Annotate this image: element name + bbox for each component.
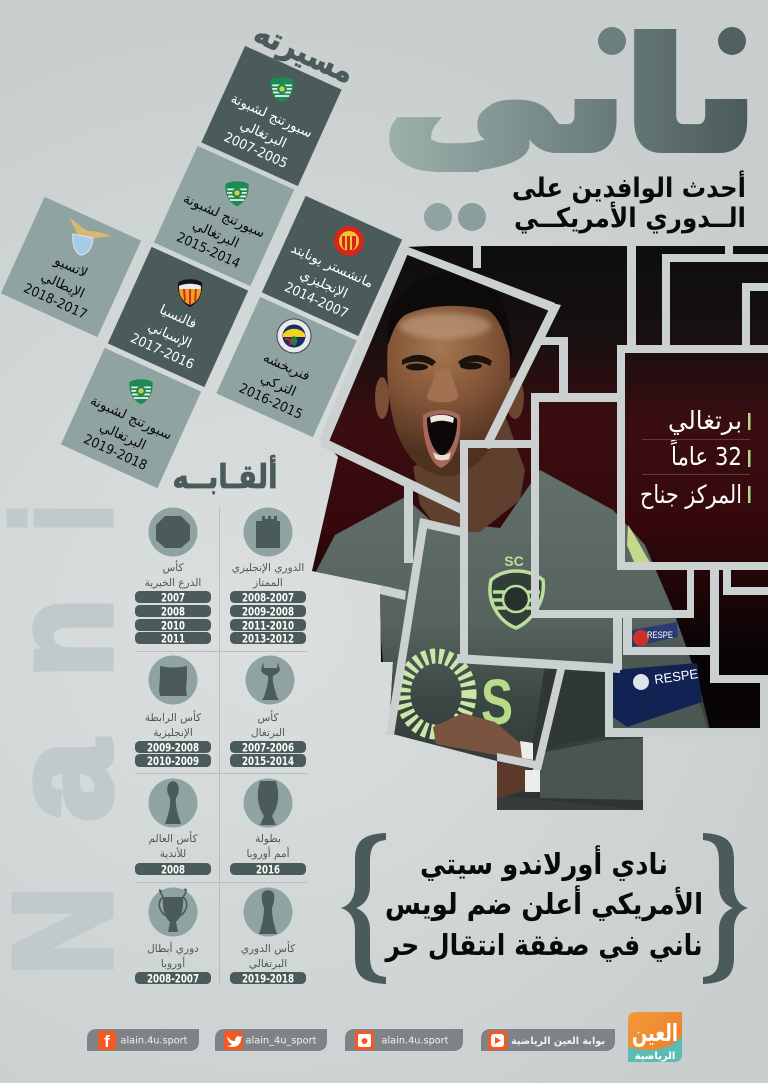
honour: Euro (230, 778, 306, 876)
panel: Manchester United: الإنجليزي (297, 267, 350, 302)
ears (375, 377, 389, 419)
honour: Premier League: 2011-2010 (242, 618, 294, 632)
shirt crest: Sporting (490, 553, 543, 628)
honour: Premier League (230, 508, 306, 646)
honour: Portuguese League: كأس الدوري (241, 941, 295, 955)
honour: Community Shield: 2008 (161, 604, 185, 618)
icon: Lazio eagle crest (69, 217, 111, 255)
panel: Sporting 2014-2015: البرتغالي (190, 217, 241, 252)
honour: Club World Cup: للأندية (160, 847, 186, 860)
social: instagram: alain.4u.sport (382, 1036, 449, 1046)
honour: Champions League: دوري أبطال (147, 941, 199, 955)
darker lower shirt (534, 668, 605, 738)
panel: Lazio: الإيطالي (39, 268, 87, 302)
title: Nani in Arabic (389, 27, 748, 231)
nose (427, 368, 458, 402)
icon: cup (261, 662, 280, 700)
honour: Community Shield: 2011 (161, 632, 185, 646)
social: youtube: بوابة العين الرياضية (511, 1036, 605, 1047)
hand (433, 713, 523, 760)
icon: league cup (159, 666, 187, 696)
social: instagram (345, 1029, 463, 1051)
photo collage: player (300, 240, 768, 820)
honour: Taca de Portugal (230, 656, 306, 768)
honour: League Cup: الإنجليزية (153, 727, 193, 739)
icon: league trophy (259, 890, 277, 934)
captain armband: RESPE (653, 666, 699, 687)
face (387, 292, 510, 476)
panel: Sporting 2005-2007: البرتغالي (238, 117, 289, 152)
panel: Sporting 2018-2019 (61, 348, 201, 488)
honour: Taca de Portugal: 2007-2006 (242, 740, 294, 754)
honour: Community Shield: الدرع الخيرية (145, 577, 201, 589)
panel: Lazio (1, 197, 141, 337)
title: Nani in Arabic: ناني (384, 10, 756, 184)
neck (413, 415, 525, 532)
fact: position: المركز جناح (640, 480, 742, 509)
honour: Portuguese League (230, 888, 306, 986)
honour: Community Shield (135, 508, 211, 646)
panel: Valencia (108, 247, 248, 387)
social: youtube (481, 1029, 615, 1051)
panel: Valencia: الإسباني (146, 318, 194, 352)
logo: Al Ain Sports: العين (632, 1019, 678, 1047)
heading: career: مسيرته (248, 15, 360, 91)
mouth (423, 410, 460, 468)
eyes (406, 364, 428, 370)
shirt sponsor letter: S (481, 666, 513, 738)
panel: Valencia: 2017-2016 (128, 330, 197, 373)
icon: Sporting crest (225, 181, 249, 206)
panel: Valencia: فالنسيا (157, 302, 199, 332)
social: twitter: alain_4u_sport (246, 1036, 317, 1046)
social: twitter (215, 1029, 327, 1051)
panel: Manchester United (262, 196, 402, 336)
honour: Premier League: الدوري الإنجليزي (232, 562, 304, 574)
honour: Champions League: أوروبا (161, 956, 185, 970)
head group (375, 306, 524, 476)
wrist (497, 762, 527, 798)
honour: Premier League: 2009-2008 (242, 604, 294, 618)
shoulder detail (627, 525, 650, 562)
panel: Fenerbahce: فنربخشه (261, 349, 312, 385)
honour: League Cup: 2010-2009 (147, 754, 199, 768)
social: facebook (87, 1029, 199, 1051)
quote: text (384, 845, 703, 962)
honour: Club World Cup (135, 778, 211, 876)
honour: Community Shield: 2007 (161, 590, 185, 604)
honour: Premier League: 2013-2012 (242, 632, 294, 646)
honour: Champions League (135, 888, 211, 986)
fact: age: 32 عاماً (670, 439, 742, 471)
subtitle: أحدث الوافدين على (512, 170, 746, 204)
panel: Sporting 2018-2019: 2019-2018 (81, 431, 150, 474)
panel: Sporting 2005-2007: 2007-2005 (222, 129, 290, 172)
panel: Manchester United: مانشستر يونايتد (288, 240, 376, 292)
social: facebook: alain.4u.sport (120, 1036, 188, 1046)
icon: Sporting crest (129, 379, 153, 404)
icon: Premier League trophy (256, 516, 280, 548)
icon: shield (156, 516, 190, 548)
quote: braces (341, 833, 748, 984)
panel: Manchester United: 2014-2007 (282, 279, 351, 322)
hair (388, 292, 512, 360)
honour: Euro: 2016 (256, 862, 280, 876)
honour: League Cup (135, 656, 211, 768)
subtitle: الــدوري الأمريكــي (514, 201, 746, 234)
panel: Lazio: لاتسيو (51, 252, 90, 281)
honours dividers (135, 507, 307, 985)
panel: Sporting 2018-2019: البرتغالي (97, 419, 148, 454)
honour: Club World Cup: كأس العالم (149, 831, 197, 845)
honour: Taca de Portugal: 2015-2014 (242, 754, 294, 768)
forearm sleeve (540, 738, 643, 800)
shirt crest: Sporting: SC (504, 553, 524, 569)
watermark: Nani vertical lettering (0, 504, 140, 975)
panel: Sporting 2014-2015: 2015-2014 (174, 229, 243, 272)
honour: Premier League: 2008-2007 (242, 590, 294, 604)
fact: nationality: برتغالي (668, 406, 742, 435)
panel: Fenerbahce: 2016-2015 (237, 380, 305, 423)
armband upper (632, 622, 678, 647)
honour: Euro: بطولة (255, 833, 281, 845)
icon: Euro trophy (258, 781, 278, 825)
photo frames: light strokes (319, 245, 768, 770)
honour: Taca de Portugal: كأس (257, 710, 279, 724)
captain armband (613, 663, 702, 727)
icon: Sporting crest (270, 77, 294, 102)
honour: Community Shield: كأس (162, 560, 184, 574)
quote: text: ناني في صفقة انتقال حر (384, 928, 702, 962)
logo: Al Ain Sports: الرياضية (635, 1051, 675, 1062)
panel: Sporting 2014-2015: سبورتنج لشبونة (181, 191, 267, 241)
honour: Euro: أمم أوروبا (246, 846, 290, 860)
icon: Club World Cup trophy (165, 781, 181, 824)
icon: Valencia crest (178, 279, 202, 307)
honour: League Cup: 2009-2008 (147, 740, 199, 754)
player torso and shirt (314, 470, 710, 810)
honour: Portuguese League: البرتغالي (249, 958, 287, 970)
quote: text: نادي أورلاندو سيتي (420, 845, 668, 881)
panel: Sporting 2005-2007: سبورتنج لشبونة (228, 91, 315, 141)
shirt sponsor ring (403, 656, 469, 732)
honour: League Cup: كأس الرابطة (145, 710, 201, 724)
panel: Lazio: 2018-2017 (21, 280, 90, 323)
panel: Fenerbahce (216, 297, 357, 437)
right sleeve (613, 703, 708, 728)
icon: Fenerbahce crest (277, 319, 311, 353)
armband upper: RESPE (647, 630, 673, 641)
social: facebook: f (104, 1032, 110, 1051)
heading: titles: ألقـابــه (172, 455, 278, 496)
quote: text: الأمريكي أعلن ضم لويس (385, 885, 703, 921)
panel: Sporting 2018-2019: سبورتنج لشبونة (88, 393, 174, 443)
icon: Champions League trophy (159, 889, 187, 932)
forehead highlight (399, 313, 491, 339)
panel: Sporting 2005-2007 (201, 46, 342, 186)
honour: Portuguese League: 2019-2018 (242, 972, 294, 986)
eyebrows (402, 355, 436, 366)
logo: Al Ain Sports (628, 1012, 682, 1062)
honour: Club World Cup: 2008 (161, 862, 185, 876)
player facts (640, 406, 750, 509)
panel: Fenerbahce: التركي (258, 370, 298, 400)
subtitle (512, 170, 746, 234)
honour: Community Shield: 2010 (161, 618, 185, 632)
honour: Premier League: الممتاز (252, 577, 283, 589)
icon: Manchester United crest (334, 226, 364, 256)
sweatband (520, 741, 540, 792)
panel: Sporting 2014-2015 (154, 146, 294, 286)
honour: Champions League: 2008-2007 (147, 972, 199, 986)
honour: Taca de Portugal: البرتغال (251, 727, 285, 739)
